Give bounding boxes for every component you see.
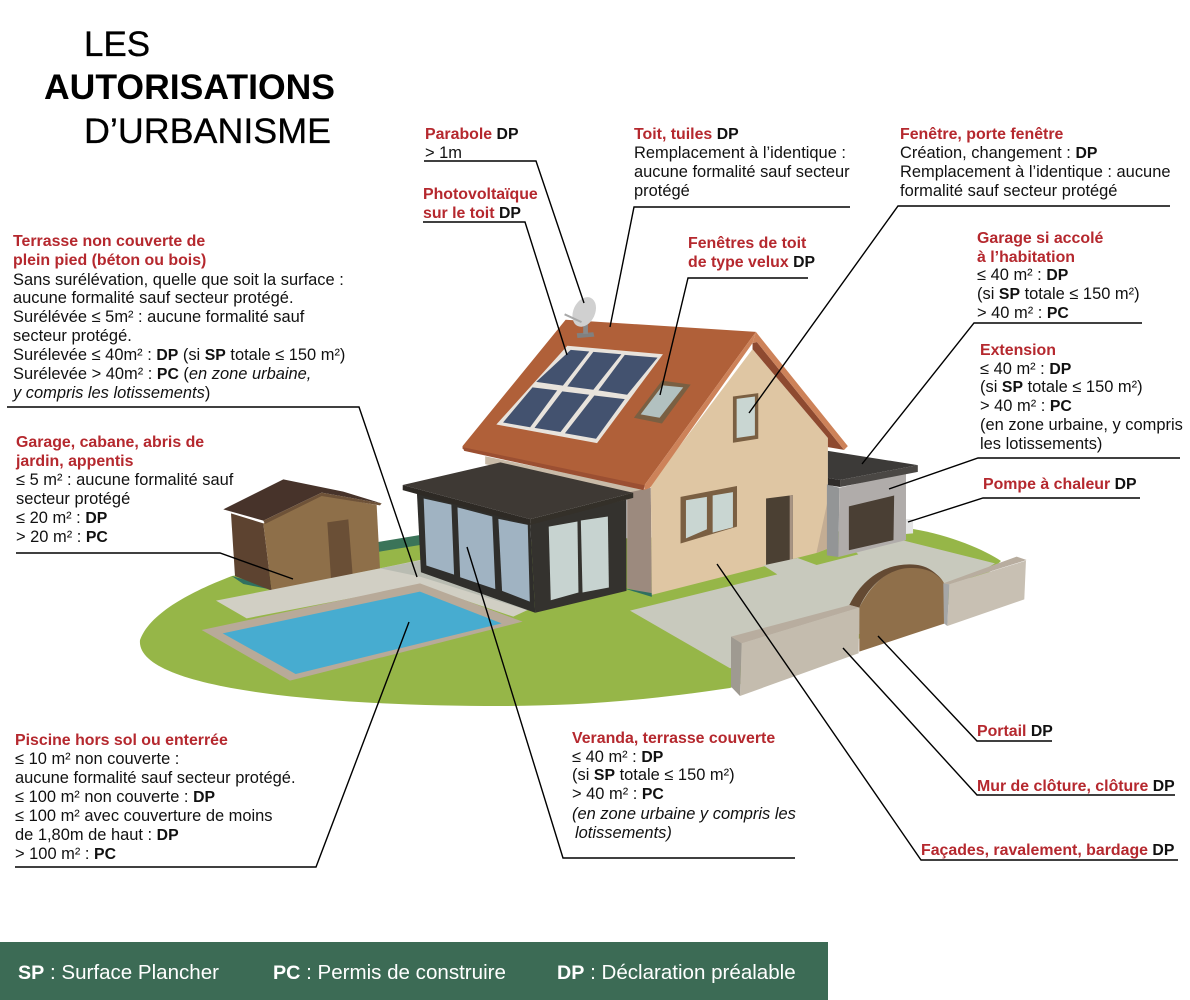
callout: véranda: Veranda, terrasse couverte <box>572 730 775 747</box>
legend bar: DP : Déclaration préalable <box>557 961 796 984</box>
callout: piscine: ≤ 100 m² non couverte : DP <box>15 788 215 806</box>
callout: toit, tuiles <box>610 126 850 327</box>
title: AUTORISATIONS <box>44 68 335 107</box>
callout: garage, cabane: > 20 m² : PC <box>16 528 108 546</box>
callout: photovoltaïque: Photovoltaïque <box>423 186 538 203</box>
callout: terrasse: Terrasse non couverte de <box>13 233 205 250</box>
callout: façades: Façades, ravalement, bardage DP <box>921 842 1174 859</box>
lawn <box>140 529 1001 706</box>
veranda <box>417 493 535 613</box>
callout: terrasse: y compris les lotissements) <box>12 384 210 402</box>
callout: terrasse: Surélévée ≤ 5m² : aucune formalité sauf <box>13 308 305 326</box>
callout: terrasse: Surélevée ≤ 40m² : DP (si SP totale ≤ 150 m²) <box>13 346 345 364</box>
callout: garage, cabane <box>15 434 293 579</box>
velux roof window <box>634 381 691 424</box>
callout: mur de clôture <box>843 648 1175 795</box>
callout: parabole: > 1m <box>425 144 462 162</box>
callout: photovoltaïque <box>423 186 567 355</box>
callout: terrasse <box>7 233 417 577</box>
callout: véranda: > 40 m² : PC <box>572 785 664 803</box>
callout: photovoltaïque: sur le toit DP <box>423 205 521 222</box>
callout: fenêtre, porte fenêtre: formalité sauf secteur protégé <box>900 182 1117 200</box>
lower window <box>681 486 737 544</box>
solar panels <box>496 346 663 443</box>
boundary wall and gate <box>731 557 1027 696</box>
side wall <box>485 456 645 496</box>
callout: piscine: de 1,80m de haut : DP <box>15 826 179 844</box>
callout: véranda: (si SP totale ≤ 150 m²) <box>572 766 735 784</box>
callout: extension: (en zone urbaine, y compris <box>980 416 1183 434</box>
callout: terrasse: Surélevée > 40m² : PC (en zone urbaine, <box>13 365 311 383</box>
illustration: house and garden <box>140 293 1027 706</box>
callout: garage, cabane: jardin, appentis <box>15 453 134 470</box>
callout: garage, cabane: ≤ 20 m² : DP <box>16 509 107 527</box>
callout: fenêtre, porte fenêtre <box>749 126 1170 413</box>
callout: véranda: ≤ 40 m² : DP <box>572 748 663 766</box>
callout: extension: (si SP totale ≤ 150 m²) <box>980 378 1143 396</box>
callout: piscine: > 100 m² : PC <box>15 845 116 863</box>
callout: extension: ≤ 40 m² : DP <box>980 360 1071 378</box>
callout: terrasse: Sans surélévation, quelle que soit la surface : <box>13 271 344 289</box>
hedge behind the garden <box>378 535 425 572</box>
callout: piscine: ≤ 100 m² avec couverture de moins <box>15 807 273 825</box>
callout: toit, tuiles: aucune formalité sauf secteur <box>634 163 850 181</box>
callout: garage accolé: à l’habitation <box>977 249 1075 266</box>
callout: façades <box>717 564 1178 860</box>
callout: terrasse: aucune formalité sauf secteur protégé. <box>13 289 294 307</box>
callout: toit, tuiles: Toit, tuiles DP <box>634 126 739 143</box>
garden shed <box>223 479 382 591</box>
callout: piscine <box>15 622 409 867</box>
callout: portail <box>878 636 1053 741</box>
facade <box>651 349 828 595</box>
callout: garage, cabane: ≤ 5 m² : aucune formalité sauf <box>16 471 234 489</box>
driveway <box>630 538 995 668</box>
callout: garage accolé: (si SP totale ≤ 150 m²) <box>977 285 1140 303</box>
callout: toit, tuiles: Remplacement à l’identique : <box>634 144 846 162</box>
callout: extension: Extension <box>980 342 1056 359</box>
title <box>44 25 335 151</box>
callout: mur de clôture: Mur de clôture, clôture DP <box>977 778 1175 795</box>
callout: terrasse: plein pied (béton ou bois) <box>13 252 206 269</box>
callout: extension: > 40 m² : PC <box>980 397 1072 415</box>
callout: garage, cabane: Garage, cabane, abris de <box>16 434 204 451</box>
upper window <box>733 393 758 443</box>
callout: garage accolé <box>862 230 1142 464</box>
callout: extension <box>889 342 1183 489</box>
callout: portail: Portail DP <box>977 723 1053 740</box>
callout: terrasse: secteur protégé. <box>13 327 132 345</box>
callout: garage accolé: ≤ 40 m² : DP <box>977 266 1068 284</box>
title: D’URBANISME <box>84 112 331 151</box>
callout: pompe à chaleur: Pompe à chaleur DP <box>983 476 1137 493</box>
satellite dish <box>577 332 594 338</box>
callout: parabole <box>424 126 584 303</box>
callout: véranda: lotissements) <box>575 824 672 842</box>
title: LES <box>84 25 150 64</box>
callout: piscine: aucune formalité sauf secteur protégé. <box>15 769 296 787</box>
callout: extension: les lotissements) <box>980 435 1102 453</box>
callout: fenêtres de toit: de type velux DP <box>688 254 815 271</box>
callout: fenêtres de toit: Fenêtres de toit <box>688 235 807 252</box>
legend bar <box>0 942 828 1000</box>
legend bar: SP : Surface Plancher <box>18 961 219 984</box>
front door <box>766 495 793 567</box>
callout: fenêtre, porte fenêtre: Remplacement à l’identique : aucune <box>900 163 1170 181</box>
callout: parabole: Parabole DP <box>425 126 518 143</box>
main house <box>403 293 848 613</box>
legend bar: PC : Permis de construire <box>273 961 506 984</box>
callout: pompe à chaleur <box>908 476 1140 522</box>
callout: véranda: (en zone urbaine y compris les <box>572 805 796 823</box>
roof <box>463 320 756 489</box>
callout: fenêtre, porte fenêtre: Fenêtre, porte fenêtre <box>900 126 1064 143</box>
callout: garage, cabane: secteur protégé <box>16 490 130 508</box>
callout: piscine: Piscine hors sol ou enterrée <box>15 732 228 749</box>
callout: toit, tuiles: protégé <box>634 182 690 200</box>
paving and swimming pool <box>202 560 535 681</box>
callout: garage accolé: Garage si accolé <box>977 230 1103 247</box>
callout: véranda <box>467 547 796 858</box>
callout: piscine: ≤ 10 m² non couverte : <box>15 750 179 768</box>
garage and heat pump <box>827 451 918 557</box>
callout: fenêtres de toit <box>660 235 815 395</box>
callout: garage accolé: > 40 m² : PC <box>977 304 1069 322</box>
callout: fenêtre, porte fenêtre: Création, changement : DP <box>900 144 1097 162</box>
